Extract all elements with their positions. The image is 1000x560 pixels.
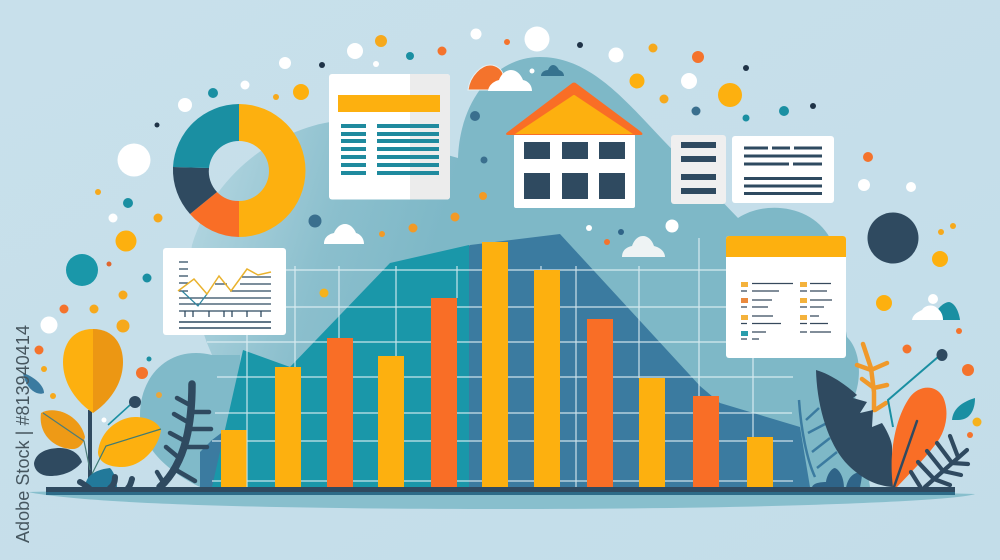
left leaf vein <box>43 413 90 470</box>
right foliage <box>799 344 975 488</box>
bar 2 <box>275 367 301 487</box>
bar chart <box>221 242 773 487</box>
cloud blob backdrop <box>191 57 870 487</box>
table header <box>338 95 440 112</box>
big leaf left half <box>63 329 93 413</box>
small blue leaves <box>812 468 862 488</box>
right leaf vein <box>92 429 161 474</box>
panel: table card <box>329 74 450 200</box>
small dark curls <box>80 477 132 488</box>
donut chart <box>173 104 306 237</box>
chart blue line <box>182 291 207 306</box>
cloud: white top <box>488 70 532 91</box>
dark jagged leaf <box>816 370 893 487</box>
left foliage <box>23 329 211 488</box>
bar 4 <box>378 356 404 487</box>
house icon <box>506 82 642 208</box>
panel: line chart card <box>163 248 286 335</box>
orange sprig <box>857 344 887 410</box>
bar 9 <box>639 378 665 487</box>
left cloud bump <box>140 353 240 487</box>
leaf vein <box>894 421 917 487</box>
cloud: white center <box>324 224 364 244</box>
house roof <box>506 82 642 135</box>
bar 10 <box>693 396 719 487</box>
bar 5 <box>431 298 457 487</box>
big leaf right half <box>93 329 123 413</box>
table rows <box>341 124 439 175</box>
cloud: orange sun behind white cloud <box>468 65 503 90</box>
small blue shrub <box>85 468 117 488</box>
donut: orange segment <box>190 192 239 237</box>
small cloud group right <box>912 294 960 320</box>
mountain: blue section <box>200 234 810 487</box>
bar 7 <box>534 270 560 487</box>
panel: text card <box>732 136 834 203</box>
house body <box>514 134 635 208</box>
orange leaf <box>892 388 946 487</box>
house gable <box>515 95 633 134</box>
grid lines <box>207 238 793 487</box>
scattered dots <box>34 26 982 438</box>
twig <box>888 357 938 427</box>
legend card header <box>726 236 846 257</box>
donut: dark segment <box>173 167 217 214</box>
cloud: dark teal <box>541 65 564 76</box>
panel: small list card <box>671 135 726 204</box>
dark fern <box>911 436 968 488</box>
bar 3 <box>327 338 353 487</box>
blue leaf <box>23 373 44 394</box>
ground shadow ellipse <box>28 489 975 509</box>
right yellow leaf <box>98 417 161 467</box>
mountain: teal section <box>212 245 469 487</box>
twig end dot <box>936 349 948 361</box>
chart axis lines <box>179 262 271 328</box>
legend swatches <box>741 282 807 336</box>
cloud: white right <box>622 236 665 257</box>
stem <box>88 410 92 478</box>
ground highlight line <box>46 492 955 495</box>
donut: yellow segment <box>239 104 306 237</box>
ground line <box>46 487 955 492</box>
legend text lines <box>741 284 832 339</box>
twig dot <box>129 396 141 408</box>
house windows <box>524 142 625 199</box>
bar 8 <box>587 319 613 487</box>
bar 1 <box>221 430 246 487</box>
teal leaf <box>952 398 975 420</box>
donut: teal segment <box>173 104 239 168</box>
twig <box>108 405 130 425</box>
bar 11 <box>747 437 773 487</box>
big dark circle <box>868 212 918 264</box>
ladder plant <box>799 400 837 477</box>
bar 6 <box>482 242 508 487</box>
dark leaf <box>34 448 82 476</box>
dark fern <box>157 384 211 487</box>
panel: legend card <box>726 236 846 358</box>
side stock label: Adobe Stock | #813940414 <box>13 325 33 543</box>
left orange leaf <box>41 410 85 449</box>
chart yellow line <box>178 269 271 294</box>
